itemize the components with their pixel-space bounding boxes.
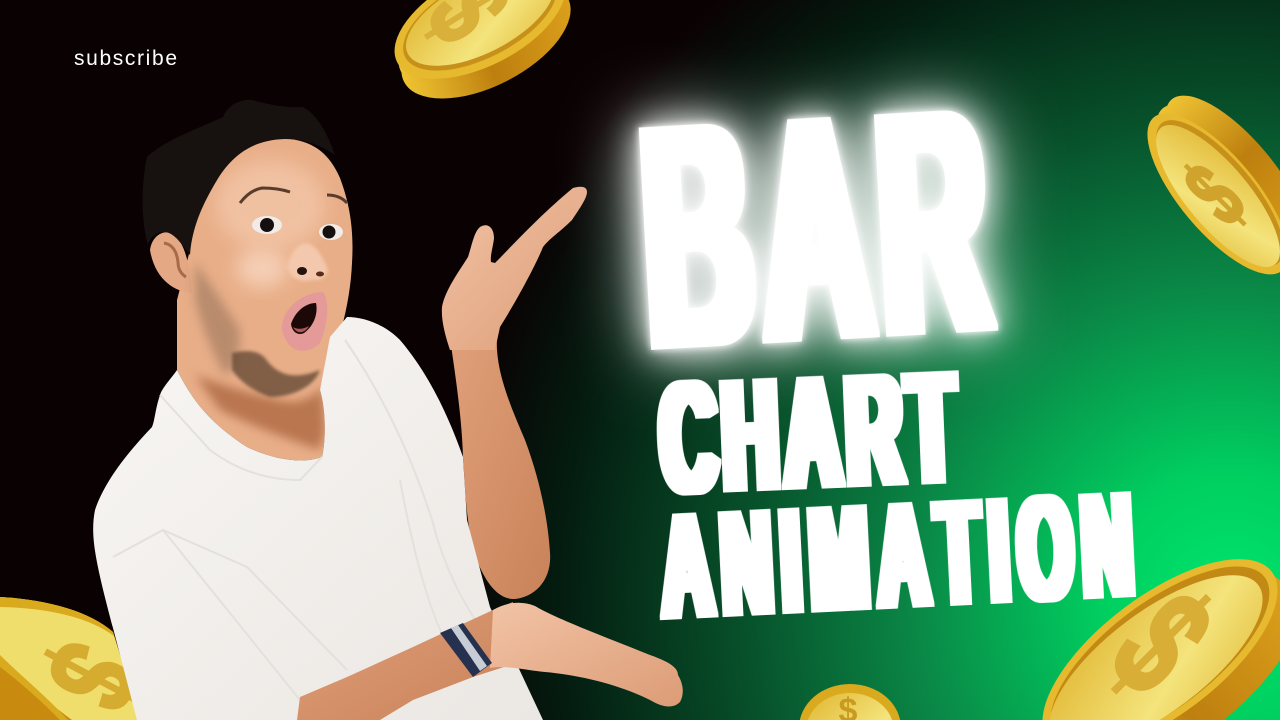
title: BAR: BAR xyxy=(634,44,1006,415)
coin: right: $ xyxy=(1165,145,1265,245)
coin: right xyxy=(1125,75,1280,295)
lower hand xyxy=(490,603,683,706)
eye: left xyxy=(252,216,282,234)
neck and head skin xyxy=(177,139,352,460)
title: ANIMATION: ANIMATION xyxy=(657,460,1146,650)
person xyxy=(93,100,683,720)
upper arm xyxy=(451,337,550,599)
hair xyxy=(143,100,335,255)
forearm xyxy=(297,602,513,720)
coin: bottom right xyxy=(1012,524,1280,720)
title: CHART: CHART xyxy=(657,340,965,527)
goatee xyxy=(232,351,320,397)
stubble xyxy=(195,262,240,375)
label: subscribe: subscribe xyxy=(74,47,177,70)
neck shadow xyxy=(195,375,325,450)
nose xyxy=(287,243,328,281)
cheek highlight xyxy=(236,248,288,288)
raised hand xyxy=(442,187,587,350)
forehead highlight xyxy=(215,160,325,250)
mouth xyxy=(282,292,327,351)
watch xyxy=(440,623,492,677)
ear xyxy=(150,232,192,293)
shirt xyxy=(93,317,543,720)
coin: top centre xyxy=(376,0,589,123)
coin: bottom centre xyxy=(799,684,901,720)
brows xyxy=(240,188,347,203)
eye: right xyxy=(319,224,343,240)
shirt folds xyxy=(113,340,490,700)
